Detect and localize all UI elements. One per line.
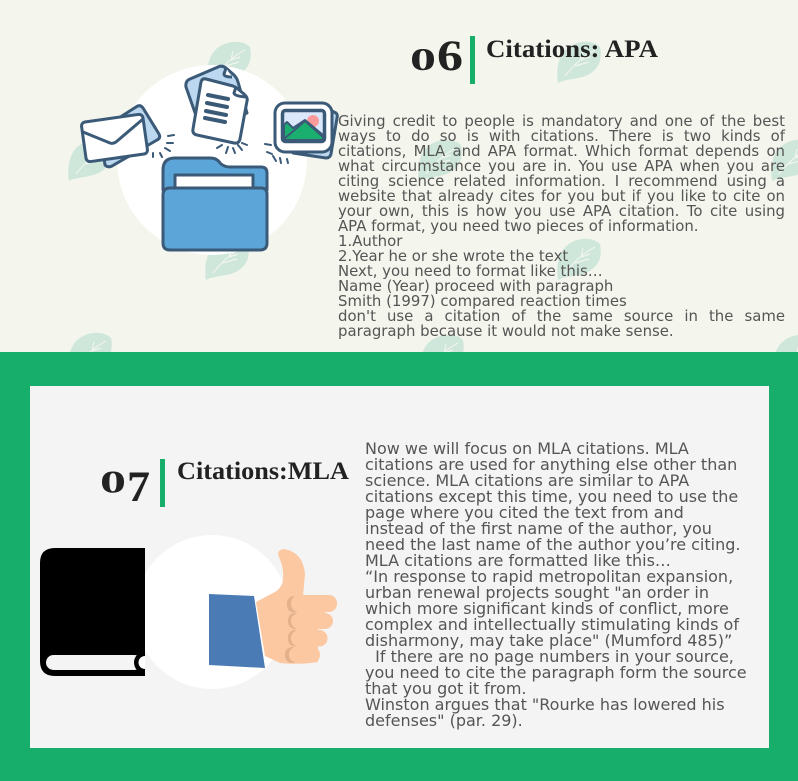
text block: MLA explanation: defenses" (par. 29). (365, 711, 523, 730)
text block: APA explanation: your own, this is how you use APA citation. To cite using (338, 202, 785, 220)
number 06: 6 (437, 33, 463, 80)
number 06 (410, 33, 463, 80)
icon: folder (163, 158, 267, 250)
heading: 07 Citations MLA (100, 458, 349, 511)
text block: APA explanation: ways to do so is with citations. There is two kinds of (338, 126, 785, 144)
number 06: 0 (410, 41, 436, 77)
illustration: book and thumbs up (40, 535, 337, 689)
text block: APA explanation: Next, you need to format like this… (338, 262, 603, 280)
text block: MLA explanation: Winston argues that "Rourke has lowered his (365, 695, 725, 714)
text block: APA explanation: citing science related information. I recommend using a (338, 172, 785, 190)
text block: APA explanation: APA format, you need two pieces of information. (338, 216, 699, 234)
text block: APA explanation: Name (Year) proceed with paragraph (338, 276, 613, 294)
text block: MLA explanation: urban renewal projects sought "an order in (365, 583, 709, 602)
heading: 06 Citations APA (410, 33, 658, 84)
text block: MLA explanation: disharmony, may take place" (Mumford 485)” (365, 631, 732, 650)
background leaf pattern (68, 42, 798, 376)
text block: APA explanation: website that already cites for you but if you like to cite on (338, 186, 785, 204)
text block: APA explanation: 2.Year he or she wrote the text (338, 246, 568, 264)
text block: APA explanation: Smith (1997) compared reaction times (338, 292, 627, 310)
text block: MLA explanation (365, 439, 747, 730)
text block: MLA explanation: instead of the first name of the author, you (365, 519, 712, 538)
text block: MLA explanation: need the last name of the author you’re citing. (365, 535, 740, 554)
text block: APA explanation: don't use a citation of the same source in the same (338, 306, 785, 324)
text block: MLA explanation: citations except this time, you need to use the (365, 487, 738, 506)
text block: MLA explanation: which more significant kinds of conflict, more (365, 599, 729, 618)
text block: MLA explanation: complex and intellectually stimulating kinds of (365, 615, 739, 634)
number 07 (100, 464, 150, 511)
green lower band (0, 352, 798, 781)
text block: MLA explanation: MLA citations are formatted like this… (365, 551, 671, 570)
panel: MLA background (30, 386, 769, 748)
text block: MLA explanation: “In response to rapid metropolitan expansion, (365, 567, 733, 586)
text block: MLA explanation: Now we will focus on MLA citations. MLA (365, 439, 689, 458)
title: Citations: APA (486, 36, 658, 63)
text block: MLA explanation: you need to cite the paragraph form the source (365, 663, 747, 682)
text block: APA explanation: paragraph because it would not make sense. (338, 322, 674, 340)
icon: envelope (81, 106, 160, 167)
spark ticks (153, 135, 288, 163)
icon: picture (275, 103, 337, 158)
text block: MLA explanation: that you got it from. (365, 679, 526, 698)
text block: MLA explanation: citations are used for anything else other than (365, 455, 737, 474)
text block: APA explanation: 1.Author (338, 232, 402, 250)
text block: APA explanation: citations, MLA and APA format. Which format depends on (338, 142, 785, 160)
text block: MLA explanation: page where you cited the text from and (365, 503, 684, 522)
text block: APA explanation: what circumstance you are in. You use APA when you are (338, 156, 785, 174)
text block: APA explanation: Giving credit to people is mandatory and one of the best (338, 112, 785, 130)
number 07: 7 (127, 464, 150, 511)
text block: MLA explanation: science. MLA citations are similar to APA (365, 471, 689, 490)
icon: thumbs up hand (209, 549, 337, 668)
icon: book (40, 548, 145, 676)
text block: APA explanation (338, 112, 786, 340)
text block: MLA explanation: If there are no page numbers in your source, (375, 647, 734, 666)
title: Citations:MLA (177, 458, 349, 485)
number 07: 0 (100, 464, 126, 500)
green bar (470, 36, 475, 84)
illustration: folder with files (81, 65, 337, 255)
green bar (160, 459, 165, 507)
icon: document (186, 66, 247, 143)
